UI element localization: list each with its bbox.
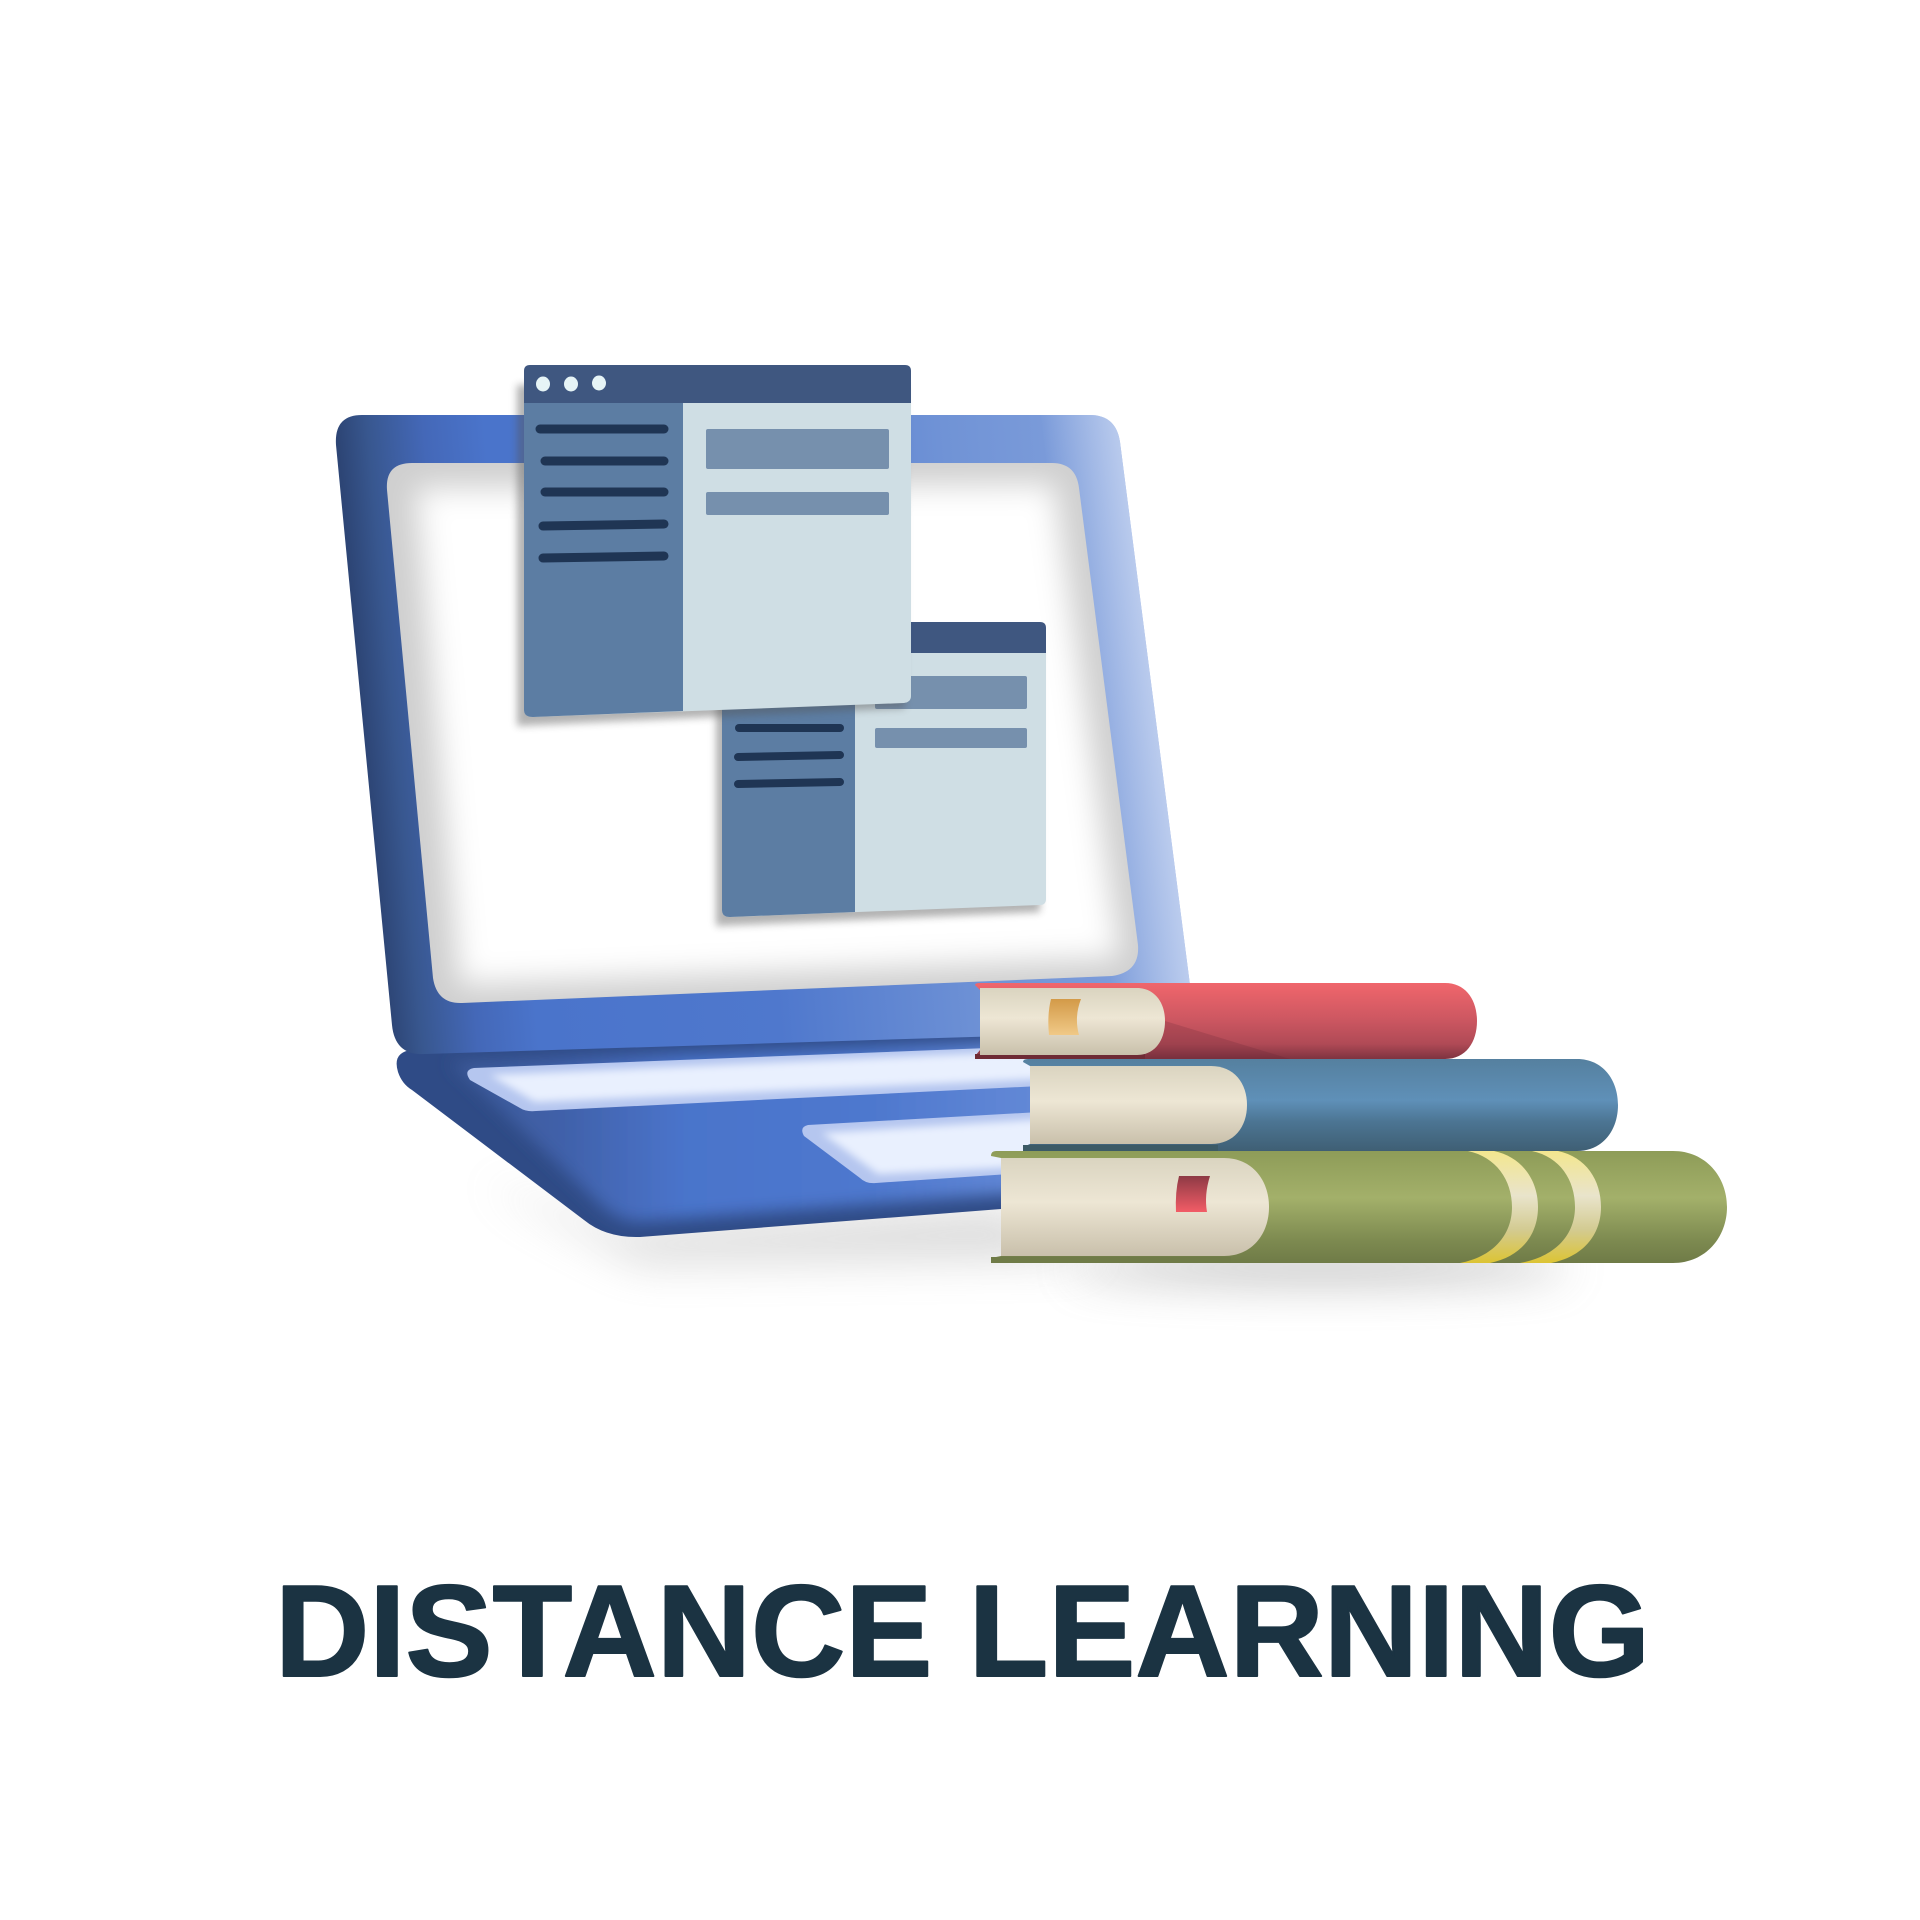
back window sidebar lines [738,728,840,784]
book stack [975,983,1727,1263]
keyboard panel [467,1048,1030,1112]
red book bookmark [1048,999,1081,1035]
front window content blocks [706,429,889,515]
back window content blocks [875,676,1027,748]
red book pages [980,988,1165,1055]
laptop [336,415,1196,1237]
title: DISTANCE LEARNING [275,1558,1650,1704]
blue book pages [1030,1066,1247,1144]
book: green [991,1151,1727,1263]
green book pages [1001,1158,1269,1256]
trackpad [802,1112,1030,1184]
front window shadow [517,385,905,726]
window control dots [536,376,606,392]
book: red [975,983,1477,1059]
green book stripes [1460,1151,1601,1263]
front window sidebar lines [540,429,664,558]
green book bookmark [1176,1176,1210,1212]
front window sidebar [524,395,683,717]
front window title bar [524,365,911,403]
front window body [524,395,911,717]
book: blue [1023,1059,1618,1151]
infographic canvas [282,365,1727,1678]
back window title bar [722,622,1046,653]
window: back [716,622,1046,926]
back window sidebar [722,640,855,917]
laptop screen [370,450,1160,1020]
back window body [722,640,1046,917]
laptop lid [336,415,1196,1054]
back window shadow [716,650,1040,926]
window: front [517,365,911,726]
laptop base [397,1028,1060,1237]
ground shadows [480,1180,1570,1282]
